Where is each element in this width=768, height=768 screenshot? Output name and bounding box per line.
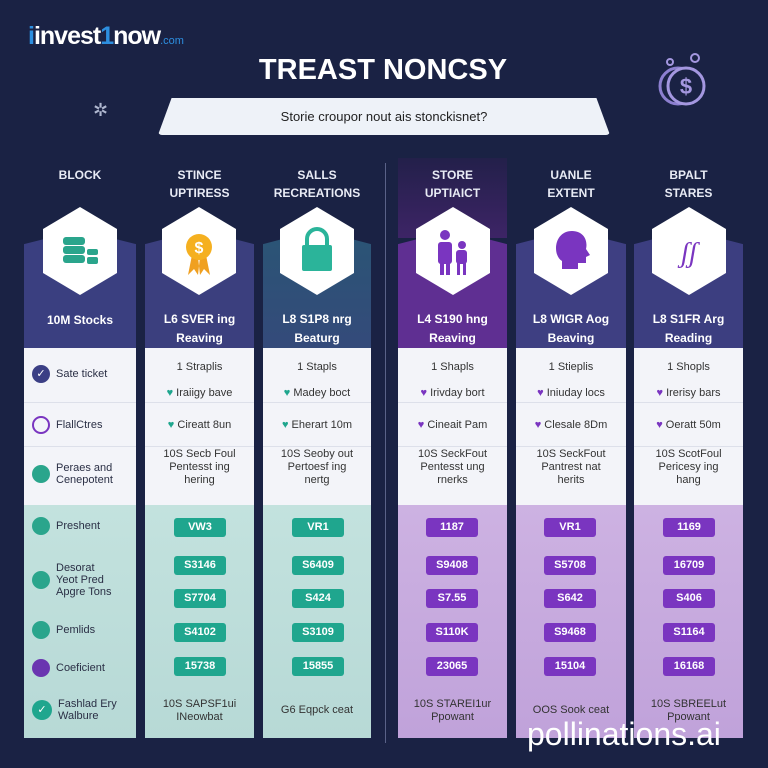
text: UPTIAICT [425, 186, 480, 200]
text: rnerks [437, 474, 468, 486]
text: 15738 [185, 660, 215, 672]
panel tops [24, 230, 136, 348]
text: Apgre Tons [56, 586, 111, 598]
text: FlallCtres [56, 419, 102, 431]
text: L6 SVER ing [164, 312, 235, 326]
text: ♥ Eherart 10m [282, 419, 352, 431]
text: G6 Eqpck ceat [281, 704, 353, 716]
watermark: pollinations.ai [527, 716, 721, 752]
row labels: ✓ [36, 368, 46, 380]
white row cells [167, 361, 232, 399]
text: S4102 [184, 626, 216, 638]
text: 1187 [440, 521, 464, 533]
text: 1 Shapls [431, 361, 474, 373]
text: L8 S1FR Arg [653, 312, 724, 326]
text: VR1 [559, 521, 581, 533]
title: TREAST NONCSY [259, 54, 507, 86]
text: 10S Secb Foul [163, 448, 236, 460]
text: S1164 [673, 626, 705, 638]
text: Pemlids [56, 624, 95, 636]
text: Pertoesf ing [288, 461, 346, 473]
text: STINCE [177, 168, 222, 182]
highlight column backdrop [398, 158, 507, 238]
text: Desorat [56, 562, 95, 574]
text: L8 WIGR Aog [533, 312, 609, 326]
text: ʃʃ [677, 238, 700, 269]
text: 15855 [303, 660, 333, 672]
text: 10S SeckFout [418, 448, 487, 460]
text: Beaving [548, 331, 594, 345]
text: hering [184, 474, 215, 486]
divider [385, 163, 386, 743]
text: S7.55 [438, 592, 466, 604]
text: Fashlad Ery [58, 698, 117, 710]
text: S5708 [554, 559, 586, 571]
text: 10S ScotFoul [655, 448, 722, 460]
text: Ppowant [431, 711, 474, 723]
logo: iinvest1now.com [28, 22, 184, 50]
text: 15104 [555, 660, 585, 672]
text: S3146 [184, 559, 216, 571]
icon: money coins: $ [680, 74, 692, 99]
text: 1 Shopls [667, 361, 710, 373]
table body white [24, 348, 136, 505]
text: ♥ Irerisy bars [656, 387, 720, 399]
white row cells: ♥ Iraiigy bave [167, 387, 232, 399]
text: ♥ Iniuday locs [537, 387, 605, 399]
panel texts: 10M Stocks [47, 313, 113, 327]
icon: gear: ✲ [93, 100, 108, 120]
text: Yeot Pred [56, 574, 104, 586]
text: ♥ Madey boct [284, 387, 350, 399]
last row cells [163, 698, 236, 723]
badges: VW3 [188, 521, 212, 533]
text: 16709 [674, 559, 704, 571]
text: ♥ Oeratt 50m [656, 419, 721, 431]
row labels [32, 365, 108, 383]
text: ♥ Cireatt 8un [168, 419, 231, 431]
last row cells: INeowbat [176, 711, 223, 723]
text: Preshent [56, 520, 100, 532]
text: S424 [305, 592, 331, 604]
text: STORE [432, 168, 473, 182]
text: OOS Sook ceat [533, 704, 609, 716]
text: ✓ [37, 704, 47, 716]
text: S642 [557, 592, 583, 604]
text: Walbure [58, 710, 99, 722]
text: S406 [676, 592, 702, 604]
text: EXTENT [547, 186, 595, 200]
text: 10S SeckFout [536, 448, 606, 460]
text: UPTIRESS [169, 186, 230, 200]
row labels: Sate ticket [56, 368, 107, 380]
text: 1 Stieplis [549, 361, 593, 373]
text: S3109 [302, 626, 334, 638]
text: Pentesst ung [420, 461, 485, 473]
text: Pentesst ing [169, 461, 230, 473]
text: Pantrest nat [541, 461, 601, 473]
text: Cenepotent [56, 474, 113, 486]
table body colored [24, 505, 136, 738]
text: Reaving [429, 331, 476, 345]
text: 23065 [437, 660, 467, 672]
column headers: BLOCK [59, 168, 101, 182]
text: S9468 [554, 626, 586, 638]
text: S6409 [302, 559, 334, 571]
text: BPALT [669, 168, 708, 182]
text: Beaturg [294, 331, 340, 345]
text: L8 S1P8 nrg [282, 312, 352, 326]
text: S7704 [184, 592, 216, 604]
text: Peraes and [56, 462, 112, 474]
search bar: Storie croupor nout ais stonckisnet? [281, 109, 487, 124]
text: Ppowant [667, 711, 710, 723]
text: 16168 [674, 660, 704, 672]
text: nertg [304, 474, 330, 486]
text: RECREATIONS [274, 186, 360, 200]
text: $ [195, 240, 204, 257]
text: ♥ Irivday bort [420, 387, 484, 399]
text: STARES [665, 186, 712, 200]
white row cells: 1 Straplis [177, 361, 222, 373]
text: ♥ Clesale 8Dm [535, 419, 607, 431]
text: herits [558, 474, 584, 486]
badges [174, 518, 226, 537]
text: S9408 [436, 559, 468, 571]
text: ♥ Cineait Pam [418, 419, 487, 431]
icon: money coins [658, 53, 706, 106]
text: Reaving [176, 331, 223, 345]
hexagon icons [43, 207, 117, 295]
search bar [158, 98, 610, 135]
text: Reading [665, 331, 712, 345]
last row cells: 10S SAPSF1ui [163, 698, 236, 710]
text: Pericesy ing [659, 461, 718, 473]
text: VR1 [307, 521, 329, 533]
text: UANLE [550, 168, 592, 182]
text: 10S SBREELut [651, 698, 726, 710]
text: L4 S190 hng [417, 312, 488, 326]
text: Coeficient [56, 662, 105, 674]
text: 10S STAREI1ur [414, 698, 491, 710]
text: hang [676, 474, 701, 486]
text: 1169 [677, 521, 701, 533]
text: S110K [435, 626, 469, 638]
text: SALLS [297, 168, 337, 182]
text: 1 Stapls [297, 361, 337, 373]
text: 10S Seoby out [281, 448, 353, 460]
